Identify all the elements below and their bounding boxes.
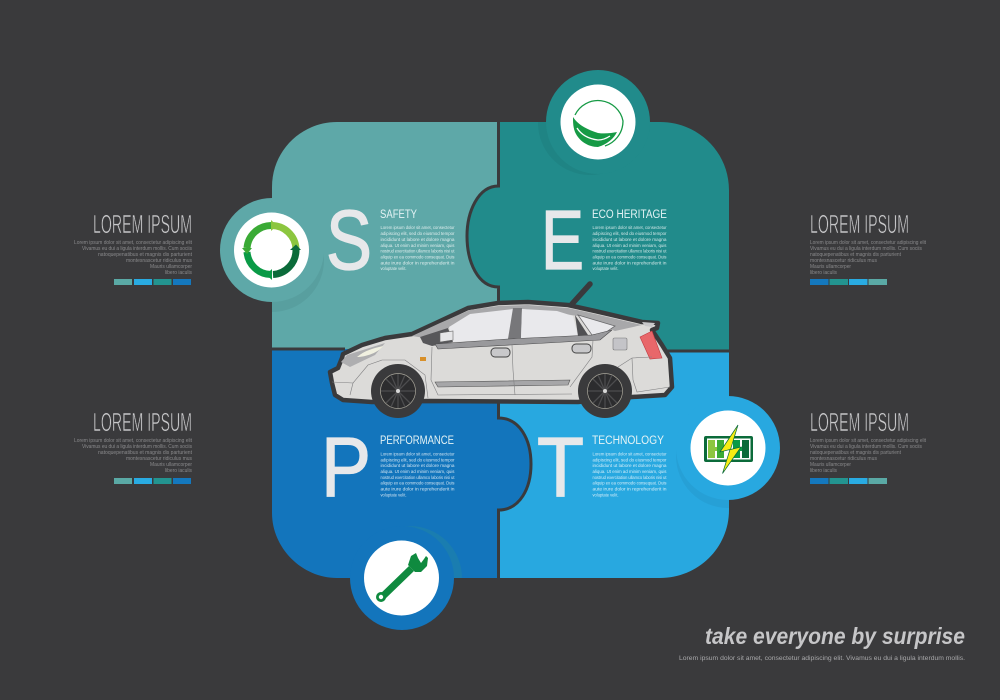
side note: bottom left: Lorem ipsum dolor sit amet, consectetur adipiscing elit: [74, 438, 193, 444]
letter P: P: [321, 420, 371, 514]
technology text: voluptate velit.: [592, 492, 618, 498]
safety text: [380, 225, 455, 272]
headlight: [341, 343, 385, 367]
tail light: [640, 331, 662, 359]
side note: top right: libero iaculis: [810, 270, 837, 276]
side note: top left: natoquepenatibus et magnis dis parturient: [98, 252, 193, 258]
eco heritage text: aliqua. Ut enim ad minim veniam, quis: [592, 243, 667, 249]
fuel door: [613, 338, 627, 350]
technology text: adipiscing elit, sed do eiusmod tempor: [592, 457, 667, 463]
safety heading: SAFETY: [380, 209, 417, 221]
footer tagline: take everyone by surprise: [705, 623, 965, 649]
front window: [449, 309, 513, 342]
side note: top right: Mauris ullamcorper: [810, 264, 851, 270]
performance text: aute irure dolor in reprehenderit in: [380, 486, 455, 492]
performance text: nostrud exercitation ullamco laboris nisi ut: [380, 475, 455, 481]
side note: bottom left: natoquepenatibus et magnis dis parturient: [98, 450, 193, 456]
side note: bottom right: Lorem ipsum dolor sit amet, consectetur adipiscing elit: [810, 438, 927, 444]
panel lines: [332, 340, 670, 398]
car body: [330, 302, 672, 402]
side note: top right: montesnascetur ridiculus mus: [810, 258, 878, 264]
rear pillar: [575, 315, 588, 336]
car illustration: [330, 284, 672, 418]
side note: top left: Vivamus eu dui a ligula interdum mollis. Cum sociis: [82, 246, 192, 252]
performance text: voluptate velit.: [380, 492, 406, 498]
spoiler: [642, 322, 655, 327]
panel: technology: [500, 352, 780, 578]
rear side window: [521, 309, 578, 338]
roof rim: [412, 305, 642, 338]
performance text: incididunt ut labore et dolore magna: [380, 463, 455, 469]
side note: top right: Lorem ipsum dolor sit amet, consectetur adipiscing elit: [810, 240, 927, 246]
side note: bottom left: libero iaculis: [165, 468, 192, 474]
letter S: S: [326, 193, 372, 287]
side note: top right: natoquepenatibus et magnis dis parturient: [810, 252, 902, 258]
icon: battery with lightning: [690, 410, 766, 486]
door handles: [491, 344, 591, 357]
eco heritage text: adipiscing elit, sed do eiusmod tempor: [592, 231, 667, 237]
side note: top left: [74, 209, 193, 285]
safety text: Lorem ipsum dolor sit amet, consectetur: [380, 225, 455, 231]
side note: top left: montesnascetur ridiculus mus: [126, 258, 192, 264]
icon: leaf globe: [560, 84, 636, 160]
belt line: [435, 330, 612, 349]
rear wheel: [578, 364, 632, 418]
safety text: nostrud exercitation ullamco laboris nisi ut: [380, 249, 455, 255]
side note: bottom left: Vivamus eu dui a ligula interdum mollis. Cum sociis: [82, 444, 192, 450]
technology text: aliquip ex ea commodo consequat. Duis: [592, 481, 667, 487]
technology text: aute irure dolor in reprehenderit in: [592, 486, 667, 492]
side note: bottom right: natoquepenatibus et magnis dis parturient: [810, 450, 902, 456]
eco heritage heading: ECO HERITAGE: [592, 209, 667, 221]
performance heading: PERFORMANCE: [380, 435, 454, 447]
performance text: Lorem ipsum dolor sit amet, consectetur: [380, 452, 455, 458]
performance text: aliqua. Ut enim ad minim veniam, quis: [380, 469, 455, 475]
icon: recycle ring: [234, 212, 309, 288]
side trim: [435, 380, 570, 387]
performance text: adipiscing elit, sed do eiusmod tempor: [380, 457, 455, 463]
side note: bottom right: libero iaculis: [810, 468, 837, 474]
side note: top left: Mauris ullamcorper: [150, 264, 192, 270]
eco heritage text: voluptate velit.: [592, 266, 618, 272]
technology text: aliqua. Ut enim ad minim veniam, quis: [592, 469, 667, 475]
panel: performance: [272, 349, 531, 630]
side note: top left: Lorem ipsum dolor sit amet, consectetur adipiscing elit: [74, 240, 193, 246]
side note: bottom left: Mauris ullamcorper: [150, 462, 192, 468]
eco heritage text: incididunt ut labore et dolore magna: [592, 237, 667, 243]
technology text: incididunt ut labore et dolore magna: [592, 463, 667, 469]
eco heritage text: [592, 225, 667, 272]
side note: top left: libero iaculis: [165, 270, 192, 276]
quarter window: [578, 315, 615, 335]
front wheel: [371, 364, 425, 418]
antenna: [572, 284, 590, 304]
safety text: aliqua. Ut enim ad minim veniam, quis: [380, 243, 455, 249]
eco heritage text: Lorem ipsum dolor sit amet, consectetur: [592, 225, 667, 231]
marker light: [420, 357, 426, 361]
icon: wrench: [364, 540, 439, 616]
side note: top left: LOREM IPSUM: [93, 209, 192, 239]
mirror: [440, 331, 453, 342]
mirror shadow: [420, 328, 453, 346]
side note: bottom right: LOREM IPSUM: [810, 407, 909, 437]
side note: bottom right: Mauris ullamcorper: [810, 462, 851, 468]
side note: top right: Vivamus eu dui a ligula interdum mollis. Cum sociis: [810, 246, 922, 252]
panel: safety: [220, 122, 500, 350]
safety text: aute irure dolor in reprehenderit in: [380, 260, 455, 266]
panel: eco heritage: [467, 70, 729, 352]
technology text: nostrud exercitation ullamco laboris nisi ut: [592, 475, 667, 481]
side note: top right: LOREM IPSUM: [810, 209, 909, 239]
technology text: Lorem ipsum dolor sit amet, consectetur: [592, 452, 667, 458]
pillar: [508, 308, 522, 339]
side note: bottom right: Vivamus eu dui a ligula interdum mollis. Cum sociis: [810, 444, 922, 450]
technology text: [592, 452, 667, 498]
eco heritage text: nostrud exercitation ullamco laboris nisi ut: [592, 249, 667, 255]
side note: bottom left: LOREM IPSUM: [93, 407, 192, 437]
side note: top right: [810, 209, 927, 285]
side note: bottom right: [810, 407, 927, 484]
puzzle divider lines: [272, 122, 729, 578]
eco heritage text: aute irure dolor in reprehenderit in: [592, 260, 667, 266]
safety text: aliquip ex ea commodo consequat. Duis: [380, 254, 455, 260]
safety text: incididunt ut labore et dolore magna: [380, 237, 455, 243]
side note: bottom left: [74, 407, 193, 484]
footer text: Lorem ipsum dolor sit amet, consectetur adipiscing elit. Vivamus eu dui a ligula interdum mollis.: [679, 655, 965, 662]
technology heading: TECHNOLOGY: [592, 435, 664, 447]
safety text: adipiscing elit, sed do eiusmod tempor: [380, 231, 455, 237]
eco heritage text: aliquip ex ea commodo consequat. Duis: [592, 254, 667, 260]
letter T: T: [537, 420, 584, 514]
side note: bottom left: montesnascetur ridiculus mus: [126, 456, 192, 462]
side note: bottom right: montesnascetur ridiculus mus: [810, 456, 878, 462]
safety text: voluptate velit.: [380, 266, 406, 272]
letter E: E: [541, 193, 584, 287]
performance text: [380, 452, 455, 498]
performance text: aliquip ex ea commodo consequat. Duis: [380, 481, 455, 487]
